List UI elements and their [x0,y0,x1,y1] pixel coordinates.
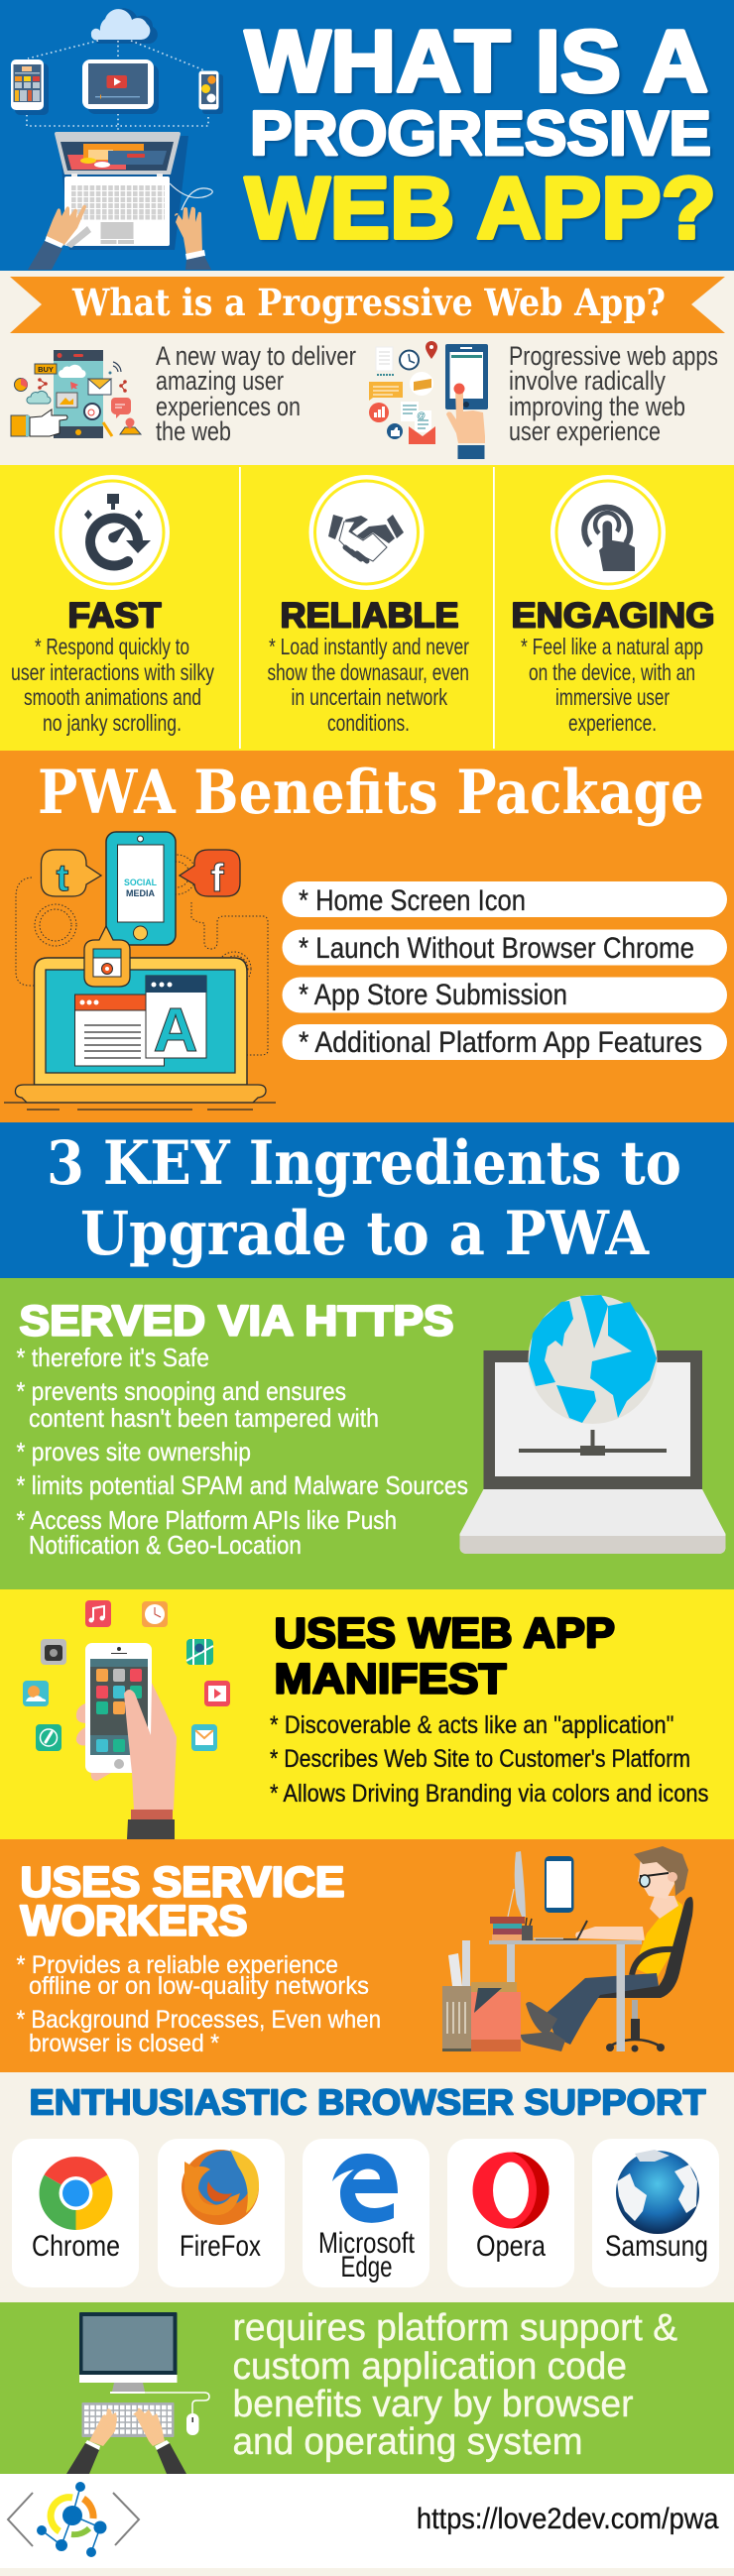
heading: fast: FAST [67,597,161,635]
text: requirements: custom application code [232,2346,627,2388]
heading: browser support: ENTHUSIASTIC BROWSER SUPPORT [30,2082,705,2122]
title: WEB APP? [245,159,716,257]
text: engaging details [521,634,703,736]
list: https points: * Access More Platform APIs like Push [16,1505,397,1535]
text: new way: A new way to deliver [156,341,356,371]
list: service worker points: * Background Processes, Even when [16,2006,381,2034]
heading: service workers: WORKERS [20,1898,247,1945]
banner ribbon [10,277,725,333]
column: reliable [268,475,469,736]
panel: hero [0,0,734,271]
browser card: chrome [12,2139,139,2287]
title [245,12,716,257]
benefit pill: home screen icon: * Home Screen Icon [299,884,526,917]
list: service worker points: * Provides a reliable experience [16,1951,338,1979]
text: requirements [232,2307,677,2463]
panel: browser support [0,2072,734,2302]
list: service worker points: browser is closed * [29,2030,219,2057]
browser card: firefox [158,2139,285,2287]
browser card: firefox: FireFox [180,2230,261,2263]
icon: t bubble [42,850,101,899]
title: PROGRESSIVE [250,99,711,169]
text: radically improving: improving the web [509,392,685,421]
text: new way: the web [156,416,231,446]
list: service worker points: offline or on low-quality networks [29,1972,369,2000]
illustration: social media devices [4,832,276,1110]
text: fast details: user interactions with silky [11,659,214,685]
illustration: social media devices: MEDIA [126,888,155,899]
list: https points: content hasn't been tampered with [29,1403,379,1433]
icon: edge [332,2154,398,2223]
text: engaging details: immersive user [555,684,670,710]
icon: tablet [82,59,159,114]
icon: video app [204,1681,230,1706]
icon: phone left [11,59,49,115]
list: https points: * limits potential SPAM and Malware Sources [16,1470,468,1500]
icon: opera [472,2152,550,2229]
panel: 3 key ingredients heading [0,1122,734,1278]
list: manifest points: * Discoverable & acts like an "application" [270,1711,674,1739]
browser card: opera: Opera [476,2230,546,2263]
browser card: chrome: Chrome [32,2230,120,2263]
text: requirements: benefits vary by browser [232,2384,634,2425]
icon: cloud [91,8,158,44]
panel: benefits package [0,751,734,1122]
icon: map app [186,1639,213,1665]
list: service worker points [16,1951,381,2057]
icon: phone [545,1856,573,1913]
heading: reliable: RELIABLE [280,597,458,635]
list: https points: * therefore it's Safe [16,1343,209,1372]
icon: camera app [41,1639,66,1665]
panel: requirements [0,2302,734,2474]
list: manifest points [270,1711,708,1808]
column: engaging [512,475,714,736]
panel: served via https [0,1278,734,1589]
heading: https: SERVED VIA HTTPS [20,1297,454,1345]
heading: service workers [20,1858,344,1945]
text: fast details: * Respond quickly to [35,634,189,659]
browser card: samsung: Samsung [605,2230,708,2263]
icon: small phone [198,71,223,114]
icon: touch [550,475,666,590]
panel: service workers [0,1839,734,2072]
text: fast details: smooth animations and [24,684,201,710]
text: radically improving [509,341,718,446]
heading: manifest: USES WEB APP [274,1610,615,1658]
browser card: samsung [592,2139,719,2287]
text: radically improving: involve radically [509,366,666,396]
benefit pill: app store: * App Store Submission [299,979,567,1011]
illustration: laptop and globe [460,1295,726,1554]
icon: samsung globe [616,2150,699,2234]
text: reliable details: * Load instantly and never [269,634,469,659]
text: requirements: and operating system [232,2421,583,2463]
list: https points: Notification & Geo-Location [29,1530,302,1560]
benefit pill: home screen icon [282,881,727,917]
icon: f bubble [180,850,240,900]
icon: stopwatch [55,475,170,590]
icon: phone and apps [369,341,488,459]
column: fast [11,475,214,736]
illustration: social media devices: A [154,996,197,1065]
list: https points [16,1343,468,1560]
browser card: edge: Edge [341,2251,393,2283]
heading: service workers: USES SERVICE [20,1858,344,1906]
illustration: developer at desk [442,1846,693,2052]
icon: mobile marketing [11,350,141,438]
text: requirements: requires platform support & [232,2307,677,2349]
banner ribbon: What is a Progressive Web App? [71,281,666,324]
title: WHAT IS A [245,12,708,110]
text: radically improving: user experience [509,416,661,446]
text: reliable details: conditions. [327,710,410,736]
list: benefits [282,881,727,1060]
illustration: desktop and typing [66,2312,209,2474]
list: https points: * proves site ownership [16,1437,251,1466]
icon: globe [528,1295,657,1424]
text: new way [156,341,356,446]
illustration: social media devices: SOCIAL [124,878,157,888]
text: new way: amazing user [156,366,284,396]
text: fast details: no janky scrolling. [43,710,182,736]
icon: call app [36,1724,61,1751]
heading: manifest [274,1610,615,1703]
panel: web app manifest [0,1589,734,1839]
icon: chrome [40,2157,112,2230]
text: reliable details: show the downasaur, even [268,659,469,685]
browser card: opera [447,2139,574,2287]
panel: fast reliable engaging [0,465,734,751]
icon: weather app [23,1681,49,1706]
icon: handshake [309,475,425,590]
icon: camera bubble [84,926,130,987]
heading: engaging: ENGAGING [512,597,714,635]
text: reliable details [268,634,469,736]
icon: t bubble: t [57,858,69,899]
icon: firefox [182,2150,259,2225]
illustration: hand and phone apps [23,1600,230,1839]
panel: footer [0,2474,734,2576]
icon: mail app [191,1724,217,1751]
logo [8,2482,139,2557]
icon: phone and apps: @ [417,410,426,420]
panel: what is a PWA [0,271,734,465]
icon: laptop with hands [28,132,212,270]
text: fast details [11,634,214,736]
browser card: edge: Microsoft [318,2227,416,2260]
icon: music app [85,1600,111,1627]
icon: mobile marketing: BUY [38,365,54,374]
benefit pill: app store [282,978,727,1013]
icon: f bubble: f [210,857,224,900]
list: https points: * prevents snooping and ensures [16,1376,346,1406]
text: engaging details: experience. [568,710,657,736]
heading: manifest: MANIFEST [274,1656,506,1703]
text: new way: experiences on [156,392,301,421]
panel: 3 key ingredients heading: Upgrade to a PWA [80,1199,651,1269]
browser card: edge [303,2139,429,2287]
text: reliable details: in uncertain network [292,684,447,710]
icon: clock app [142,1601,168,1627]
